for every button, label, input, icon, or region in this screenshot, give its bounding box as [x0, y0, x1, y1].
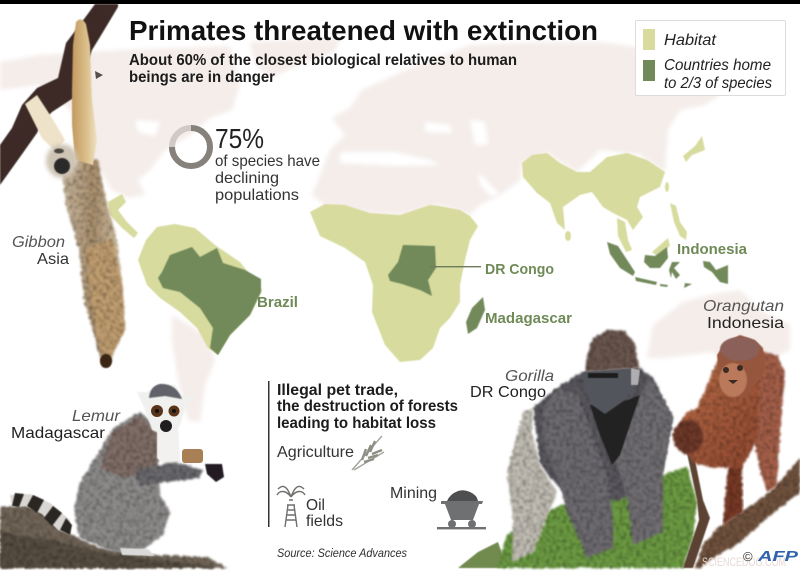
legend text: Habitat	[664, 32, 717, 49]
threats heading: Illegal pet trade,	[277, 382, 398, 399]
legend box	[636, 20, 786, 96]
torso and left arm	[673, 362, 760, 468]
label: Agriculture: Agriculture	[277, 444, 354, 461]
brow	[588, 373, 618, 378]
world map	[0, 38, 790, 422]
label: Oil fields: fields	[306, 513, 343, 530]
body	[62, 155, 125, 367]
label: Gorilla: Gorilla	[505, 368, 554, 385]
dark foot	[100, 354, 112, 368]
land: pale base	[0, 38, 790, 422]
tail stripes	[12, 493, 72, 535]
label: Orangutan: Indonesia	[707, 315, 784, 332]
habitat regions	[108, 136, 705, 362]
icon: mine cart	[437, 490, 486, 529]
right arm	[613, 378, 673, 545]
stat value: 75%	[215, 123, 264, 154]
left arm	[25, 95, 65, 151]
threats heading: the destruction of forests	[277, 398, 458, 415]
head top	[585, 330, 639, 372]
label: Orangutan: Orangutan	[703, 298, 784, 315]
label: Lemur: Lemur	[72, 408, 121, 425]
body	[74, 412, 170, 552]
silver back and leg	[507, 408, 557, 562]
source: Source: Science Advances	[277, 546, 407, 560]
legend text: to 2/3 of species	[664, 75, 772, 92]
swatch: habitat	[643, 29, 655, 50]
chest	[157, 420, 180, 467]
pupils	[155, 409, 176, 413]
animal: lemur	[0, 383, 227, 568]
animal: gorilla	[458, 330, 697, 568]
AFP logo: AFP	[757, 548, 799, 565]
title: Primates threatened with extinction	[129, 15, 598, 46]
grass wedge	[458, 542, 507, 568]
left arm	[542, 388, 613, 558]
rock shadow	[0, 532, 227, 568]
top black bar	[0, 0, 800, 4]
copyright: ©	[743, 549, 753, 564]
right arm	[750, 350, 785, 492]
torso	[533, 368, 673, 500]
hand	[673, 420, 703, 454]
tail	[10, 494, 70, 535]
stick	[681, 425, 710, 568]
branch	[695, 458, 800, 568]
food	[182, 449, 203, 463]
face	[54, 158, 70, 174]
back patch	[100, 415, 157, 478]
threats heading: leading to habitat loss	[277, 415, 436, 432]
label: Brazil: Brazil	[257, 294, 298, 311]
label: Gibbon: Asia	[37, 251, 69, 268]
hand	[205, 464, 224, 482]
map sea cut-outs	[135, 120, 500, 196]
rock	[0, 505, 227, 568]
lower fur	[86, 238, 125, 362]
head	[46, 144, 78, 178]
stat caption: of species have	[215, 153, 320, 170]
subtitle: About 60% of the closest biological relatives to human	[129, 52, 517, 69]
icon: wheat	[352, 436, 384, 470]
head cap	[54, 148, 64, 154]
crown	[149, 384, 182, 399]
branch	[0, 4, 118, 185]
legend	[636, 20, 786, 96]
label: DR Congo: DR Congo	[485, 261, 554, 278]
head	[717, 335, 765, 398]
threats block	[268, 381, 486, 560]
eye: left	[151, 405, 163, 417]
face	[719, 363, 747, 397]
eye: right	[168, 406, 180, 416]
face	[583, 368, 638, 414]
stat caption: populations	[215, 187, 299, 204]
animal: orangutan	[673, 335, 800, 568]
line: DR Congo leader	[430, 266, 481, 267]
vertical rule	[268, 381, 270, 527]
head	[137, 383, 197, 436]
right arm	[72, 19, 97, 165]
icon: oil derrick	[277, 486, 305, 527]
stat: 75% declining	[172, 123, 320, 204]
label: Lemur: Madagascar	[11, 425, 106, 442]
dark chest	[590, 395, 640, 465]
swatch: countries	[643, 60, 655, 81]
key countries	[158, 242, 728, 355]
feet	[120, 548, 155, 556]
skull top	[720, 337, 760, 361]
label: Indonesia: Indonesia	[677, 241, 748, 258]
eyes and nose	[723, 365, 743, 384]
donut chart	[172, 128, 210, 166]
label: Oil fields: Oil	[306, 497, 325, 514]
subtitle: beings are in danger	[129, 69, 275, 86]
label: Madagascar: Madagascar	[485, 310, 572, 327]
label: Mining: Mining	[390, 485, 437, 502]
label: Gibbon: Gibbon	[12, 234, 65, 251]
label: Gorilla: DR Congo	[470, 384, 546, 401]
arm	[135, 462, 203, 485]
grass	[497, 467, 697, 568]
bird	[95, 71, 103, 79]
cheek highlight	[631, 368, 640, 385]
animal: gibbon	[0, 4, 125, 368]
nose	[160, 420, 172, 432]
stat caption: declining	[215, 170, 279, 187]
legend text: Countries home	[664, 57, 771, 74]
far leg	[723, 465, 743, 525]
